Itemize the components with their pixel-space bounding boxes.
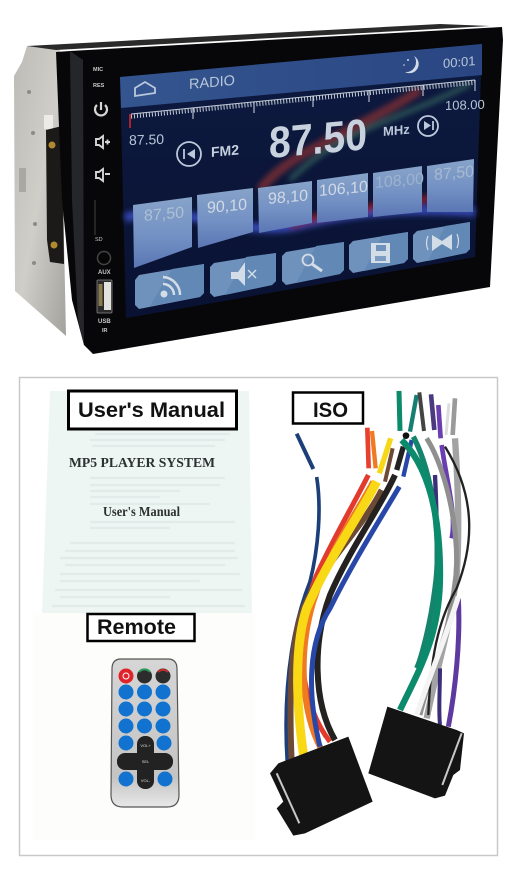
label: remote: Remote	[97, 616, 176, 639]
sd label: SD	[95, 237, 103, 243]
directional pad	[117, 736, 173, 789]
max frequency: 108.00	[445, 97, 485, 113]
frequency readout: 87.50	[269, 109, 367, 167]
usb port	[97, 280, 112, 313]
silver side chassis	[14, 46, 66, 336]
icon: mute speaker	[231, 262, 256, 286]
icon: night moon	[403, 56, 419, 73]
label: iso: ISO	[313, 399, 348, 422]
mic label: MIC	[93, 67, 103, 73]
front bezel	[56, 27, 503, 354]
left harness wires	[286, 428, 412, 763]
directional pad: VOL-	[141, 778, 151, 783]
preset tiles: 87,50	[144, 203, 184, 225]
band label: FM2	[211, 141, 239, 160]
header bar	[120, 44, 482, 108]
clock: 00:01	[443, 53, 476, 71]
remote control	[111, 659, 179, 807]
function buttons	[135, 222, 470, 309]
sd slot	[94, 200, 96, 235]
icon: power	[95, 102, 107, 115]
car stereo head unit	[14, 24, 503, 354]
label: user's manual: User's Manual	[78, 399, 225, 422]
label: remote	[88, 614, 194, 641]
icon: surround sound	[426, 234, 458, 251]
icon: save disk	[371, 243, 390, 263]
preset tiles: 90,10	[207, 195, 247, 217]
user manual booklet	[42, 391, 252, 613]
min frequency: 87.50	[129, 131, 164, 148]
blue keypad buttons	[118, 684, 172, 786]
iso wiring harness	[270, 391, 469, 836]
ir label: IR	[102, 328, 108, 334]
right connector	[368, 707, 464, 798]
icon: home	[135, 82, 155, 96]
accessories panel	[20, 378, 498, 856]
aux jack	[98, 252, 110, 264]
label: iso	[293, 392, 363, 424]
top row buttons	[118, 668, 170, 684]
side controls	[93, 67, 112, 334]
icon: volume up	[96, 136, 110, 148]
faint manual text lines	[52, 434, 245, 606]
reset label: RES	[93, 83, 105, 89]
screen aurora wallpaper	[125, 84, 475, 228]
remote photo backdrop	[33, 613, 255, 840]
unit label: MHz	[383, 122, 410, 139]
preset tiles	[133, 159, 474, 268]
top edge of unit	[27, 24, 490, 50]
icon: previous	[177, 142, 201, 166]
manual subtitle: User's Manual	[103, 504, 180, 519]
icon: search	[302, 254, 322, 271]
preset tiles: 87,50	[434, 162, 474, 184]
radio title: RADIO	[189, 73, 235, 93]
aux label: AUX	[98, 270, 111, 276]
label: user's manual	[68, 391, 236, 429]
mounting bracket with screws	[46, 126, 64, 264]
directional pad: SEL	[142, 759, 150, 764]
icon: signal	[160, 277, 180, 298]
preset tiles: 98,10	[268, 186, 308, 208]
tuning ruler	[130, 80, 475, 128]
preset tiles: 108,00	[375, 170, 424, 192]
directional pad: VOL+	[140, 743, 151, 748]
preset tiles: 106,10	[319, 178, 368, 200]
touch screen	[120, 44, 485, 318]
usb label: USB	[98, 319, 111, 325]
left connector	[270, 737, 373, 836]
icon: next	[418, 116, 438, 136]
icon: volume down	[96, 169, 110, 181]
manual title: MP5 PLAYER SYSTEM	[69, 455, 215, 470]
right harness wires	[399, 391, 469, 727]
